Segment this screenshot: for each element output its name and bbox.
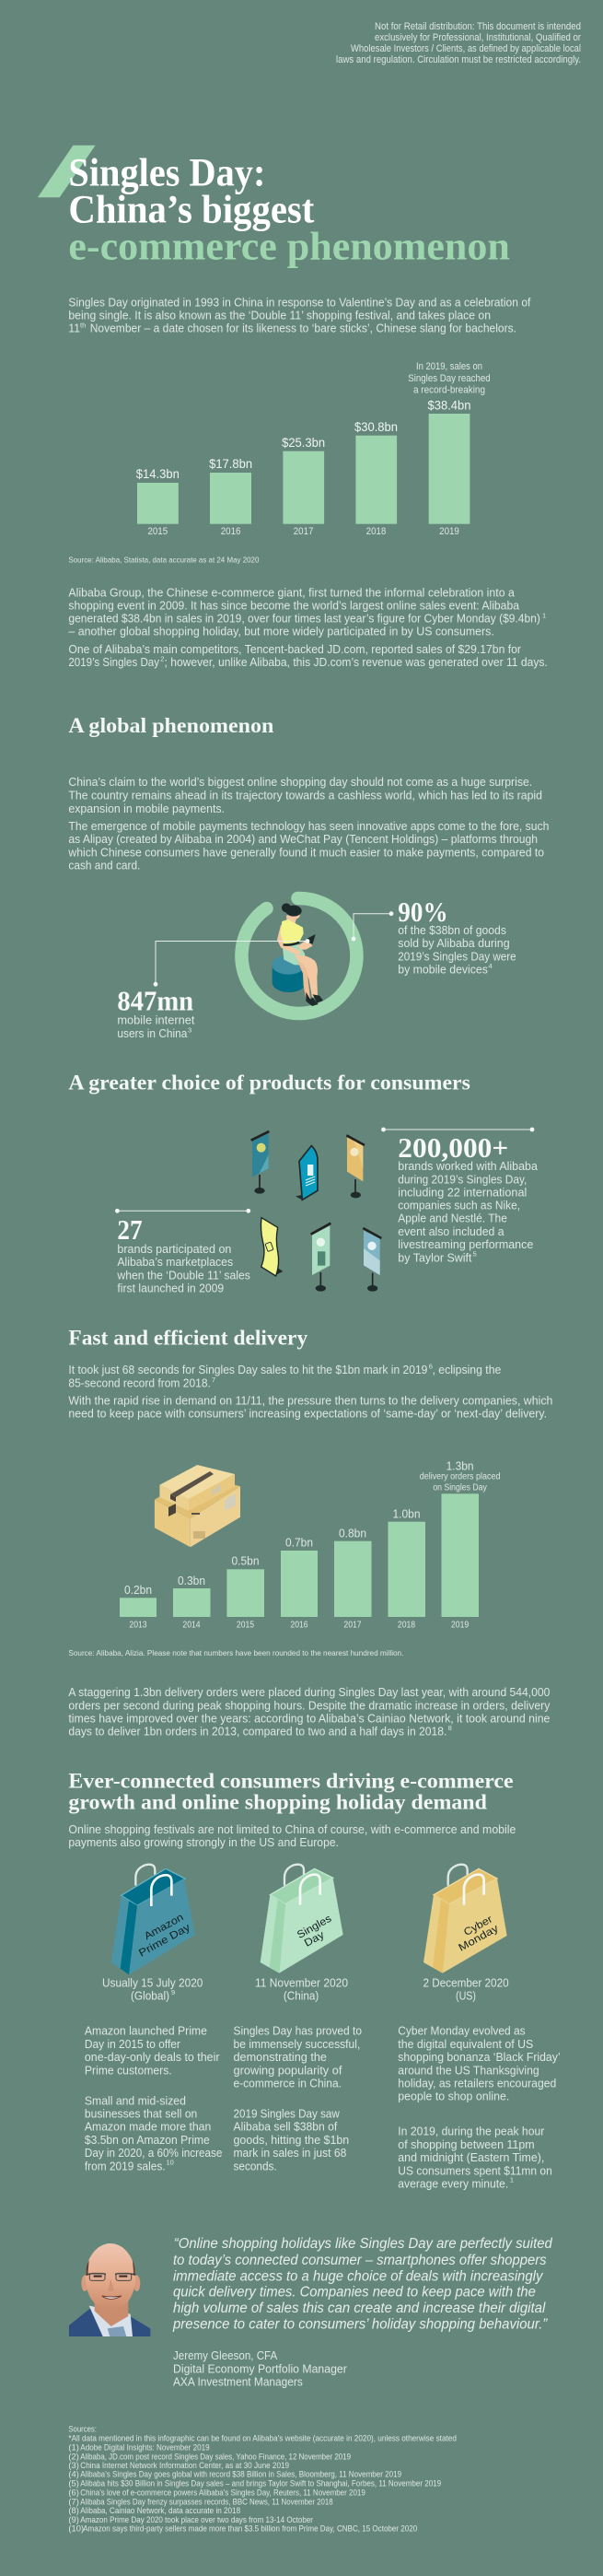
sources: Adobe Digital Insights: November 2019 — [80, 2441, 210, 2452]
chart annotation: a record-breaking — [413, 385, 485, 396]
stat: 27 brands: when the ‘Double 11’ sales — [116, 1268, 250, 1282]
bar chart: delivery orders — [120, 1458, 500, 1631]
column: Singles Day — [234, 2024, 362, 2172]
paragraph: Alibaba Group: generated $38.4bn in sales in 2019, over four times last year’s figure for Cyber Monday ($9.4bn) — [68, 612, 540, 626]
column: Singles Day: Singles Day has proved to — [234, 2024, 362, 2038]
stat: 27 brands: Alibaba’s marketplaces — [117, 1255, 233, 1269]
title: e-commerce phenomenon — [68, 226, 510, 269]
bar values: 0.8bn — [339, 1527, 366, 1540]
column: Amazon Prime Day: Day in 2015 to offer — [85, 2037, 181, 2051]
stat: 200,000+: brands worked with Alibaba — [398, 1159, 539, 1173]
paragraph: 68 seconds — [68, 1362, 501, 1389]
stat: 200,000+: 5 — [473, 1249, 477, 1259]
column: Cyber Monday: holiday, as retailers encouraged — [398, 2076, 556, 2090]
sources: Alibaba, Cainiao Network, data accurate in 2018 — [80, 2505, 240, 2515]
column: Amazon Prime Day — [85, 2024, 222, 2172]
column: Cyber Monday — [398, 2024, 561, 2190]
paragraph: mobile payments: The emergence of mobile payments technology has seen innovative apps come to the fore, such — [68, 819, 549, 833]
bag: Cyber Monday: Cyber — [462, 1914, 494, 1938]
year axis: 2016 — [221, 526, 240, 537]
bag: Singles Day — [261, 1865, 343, 1973]
sources: Sources: — [68, 2424, 97, 2434]
column: Cyber Monday: around the US Thanksgiving — [398, 2063, 539, 2077]
column: Singles Day: 2019 Singles Day saw — [234, 2107, 340, 2121]
stat: 27 brands: 27 — [117, 1213, 143, 1246]
paragraph: Alibaba Group: shopping event in 2009. It has since become the world’s largest online sales event: Alibaba — [68, 598, 520, 612]
paragraph: 68 seconds: It took just 68 seconds for Singles Day sales to hit the $1bn mark in 2019 — [68, 1363, 427, 1376]
column: Cyber Monday: 1 — [510, 2176, 514, 2184]
sources: (10) — [68, 2523, 84, 2534]
intro paragraph — [68, 295, 531, 335]
column: Singles Day: Alibaba sell $38bn of — [234, 2120, 338, 2134]
stat: 200,000+: Apple and Nestlé. The — [398, 1212, 507, 1225]
paragraph: cashless world — [68, 775, 542, 815]
intro paragraph: being single. It is also known as the ‘Double 11’ shopping festival, and takes place on — [68, 308, 491, 322]
date caption: Cyber Monday: 2 December 2020 — [423, 1976, 509, 1990]
quote: high volume of sales this can create and increase their digital — [173, 2301, 546, 2316]
disclaimer text — [336, 21, 581, 65]
chart annotation: In 2019, sales on — [416, 361, 482, 372]
paragraph: online shopping festivals: payments also growing strongly in the US and Europe. — [68, 1835, 339, 1849]
sources: (3) — [68, 2460, 79, 2470]
date caption: Singles Day: (China) — [284, 1989, 319, 2003]
column: Amazon Prime Day: Day in 2020, a 60% increase — [85, 2146, 222, 2160]
stat: 27 brands: first launched in 2009 — [117, 1282, 224, 1295]
paragraph: JD.com: 2019’s Singles Day — [68, 655, 160, 669]
stat: 200,000+ — [381, 1128, 539, 1264]
chart annotation: delivery orders placed — [420, 1472, 500, 1482]
column: Amazon Prime Day: from 2019 sales. — [85, 2159, 166, 2172]
year axis: 2015 — [147, 526, 168, 537]
column: Cyber Monday: In 2019, during the peak hour — [398, 2125, 545, 2138]
date caption: Prime Day: (Global) — [131, 1989, 169, 2003]
year axis — [147, 526, 459, 537]
sources: (7) — [68, 2496, 79, 2506]
column: Cyber Monday: Cyber Monday evolved as — [398, 2024, 526, 2038]
date caption: Cyber Monday — [423, 1976, 509, 2003]
paragraph: JD.com: ; however, unlike Alibaba, this JD.com’s revenue was generated over 11 days. — [164, 655, 548, 669]
bar values: $30.8bn — [354, 419, 398, 434]
paragraph: JD.com — [68, 642, 548, 669]
bag: Singles Day: Day — [303, 1929, 327, 1950]
sources: (5) — [68, 2478, 79, 2488]
stat: 200,000+: 200,000+ — [398, 1131, 508, 1164]
illustration: display banners — [251, 1131, 381, 1292]
year axis: 2018 — [366, 526, 386, 537]
bar values: 0.2bn — [124, 1583, 152, 1597]
bar chart: Singles Day sales — [136, 361, 491, 537]
stat: 90 percent: of the $38bn of goods — [398, 923, 506, 937]
quote: presence to cater to consumers’ holiday shopping behaviour.” — [172, 2317, 548, 2333]
quote attribution: Digital Economy Portfolio Manager — [173, 2361, 347, 2375]
portrait: Jeremy Gleeson — [69, 2243, 150, 2336]
column: Singles Day: seconds. — [234, 2159, 277, 2172]
column: Cyber Monday: people to shop online. — [398, 2089, 509, 2102]
paragraph: cashless world: The country remains ahead in its trajectory towards a cashless world, which has led to its rapid — [68, 789, 542, 802]
year axis — [129, 1621, 470, 1631]
paragraph: delivery pressure — [68, 1393, 552, 1421]
year axis: 2015 — [237, 1621, 254, 1631]
stat: 90 percent — [398, 896, 516, 977]
stat: 90 percent: by mobile devices — [398, 963, 488, 977]
quote attribution: AXA Investment Managers — [173, 2374, 303, 2388]
connector: 847mn — [154, 939, 309, 987]
paragraph: mobile payments: which Chinese consumers have generally found it much easier to make payments, compared to — [67, 845, 544, 859]
intro paragraph: November – a date chosen for its likeness to ‘bare sticks’, Chinese slang for bachelors. — [90, 321, 516, 335]
sources: Alibaba Singles Day frenzy surpasses records, BBC News, 11 November 2018 — [80, 2496, 333, 2506]
bar values: 1.3bn — [446, 1458, 474, 1472]
bag: Singles Day: Singles — [296, 1913, 334, 1941]
bag: Amazon Prime Day: Amazon — [143, 1912, 186, 1942]
paragraph: Alibaba Group: – another global shopping holiday, but more widely participated in by US consumers. — [68, 625, 494, 638]
column: Singles Day: goods, hitting the $1bn — [234, 2133, 349, 2147]
bag: Amazon Prime Day: Prime Day — [137, 1922, 192, 1960]
bar values: $25.3bn — [282, 435, 325, 450]
heading: A global phenomenon: A global phenomenon — [68, 714, 274, 737]
chart annotation — [420, 1472, 500, 1493]
bar values: $14.3bn — [136, 466, 180, 481]
sources: *All data mentioned in this infographic can be found on Alibaba’s website (accurate in 2020), unless otherwise stated — [68, 2433, 457, 2443]
stat: 200,000+: by Taylor Swift — [398, 1250, 472, 1264]
decorative title slash — [38, 146, 96, 197]
illustration: woman on stool with phone — [272, 903, 323, 1006]
column: Cyber Monday: of shopping between 11pm — [398, 2137, 535, 2151]
chart annotation: on Singles Day — [433, 1482, 487, 1493]
bag: Cyber Monday — [423, 1865, 507, 1973]
stat: 200,000+: livestreaming performance — [398, 1237, 533, 1251]
chart source: Source: Alibaba, Statista, data accurate as at 24 May 2020 — [68, 556, 260, 565]
column: Singles Day: e-commerce in China. — [234, 2076, 342, 2090]
bar values — [124, 1458, 474, 1597]
sources: Alibaba hits $30 Billion in Singles Day sales – and brings Taylor Swift to Shanghai, Forbes, 11 November 2019 — [80, 2478, 441, 2488]
paragraph: delivery pressure: With the rapid rise in demand on 11/11, the pressure then turns to the delivery companies, which — [68, 1393, 552, 1407]
stat: 90 percent: sold by Alibaba during — [398, 936, 510, 950]
paragraph: 68 seconds: 85-second record from 2018. — [68, 1376, 211, 1389]
column: Singles Day: mark in sales in just 68 — [234, 2146, 346, 2160]
column: Cyber Monday: US consumers spent $11mn on — [398, 2163, 552, 2177]
banner: teal sun — [251, 1131, 269, 1194]
sources: (4) — [68, 2469, 79, 2479]
bag: Amazon Prime Day — [111, 1865, 195, 1974]
shopping bags — [111, 1865, 507, 1974]
stat: 27 brands — [115, 1209, 250, 1295]
stat: 847mn: 3 — [188, 1026, 191, 1034]
column: Amazon Prime Day: Amazon launched Prime — [85, 2024, 207, 2038]
bar values: 0.7bn — [285, 1536, 313, 1550]
date caption: Cyber Monday: (US) — [456, 1989, 476, 2003]
quote attribution — [173, 2348, 347, 2388]
stat: 200,000+: event also included a — [398, 1224, 504, 1238]
intro paragraph: 11 — [68, 321, 80, 335]
paragraph: cashless world: expansion in mobile payments. — [68, 802, 225, 815]
column: Cyber Monday: and midnight (Eastern Time), — [398, 2150, 544, 2164]
quote: immediate access to a huge choice of deals with increasingly — [173, 2268, 544, 2284]
heading: delivery: Fast and efficient delivery — [68, 1326, 308, 1349]
stat: 200,000+: during 2019’s Singles Day, — [398, 1172, 527, 1186]
date caption: Prime Day: 9 — [171, 1988, 175, 1996]
column: Amazon Prime Day: Prime customers. — [85, 2063, 172, 2077]
stat: 90 percent: 2019’s Singles Day were — [398, 949, 516, 963]
paragraph: mobile payments — [67, 819, 549, 872]
paragraph: 1.3bn orders: A staggering 1.3bn delivery orders were placed during Singles Day last year, with around 544,000 — [68, 1685, 550, 1699]
column: Amazon Prime Day: $3.5bn on Amazon Prime — [85, 2133, 210, 2147]
sources: Amazon says third-party sellers made more than $3.5 billion from Prime Day, CNBC, 15 October 2020 — [83, 2523, 417, 2534]
bars — [137, 414, 470, 524]
quote: quick delivery times. Companies need to keep pace with the — [173, 2285, 536, 2301]
column: Cyber Monday: the digital equivalent of US — [398, 2037, 533, 2051]
heading: ever-connected consumers: growth and online shopping holiday demand — [68, 1790, 487, 1813]
stat: 200,000+: including 22 international — [398, 1185, 527, 1199]
year axis: 2013 — [129, 1621, 147, 1631]
sources: Alibaba’s Singles Day goes global with record $38 Billion in Sales, Bloomberg, 11 November 2019 — [80, 2469, 401, 2479]
sources: (6) — [68, 2488, 79, 2498]
quote: “Online shopping holidays like Singles Day are perfectly suited — [174, 2236, 553, 2252]
sources: China Internet Network Information Center, as at 30 June 2019 — [80, 2460, 289, 2470]
quote attribution: Jeremy Gleeson, CFA — [173, 2348, 278, 2362]
column: Singles Day: demonstrating the — [234, 2050, 327, 2064]
banner: blue kiosk — [296, 1146, 318, 1200]
year axis: 2017 — [294, 526, 313, 537]
date caption: Singles Day: 11 November 2020 — [255, 1976, 348, 1990]
column: Singles Day: be immensely successful, — [234, 2037, 360, 2051]
column: Cyber Monday: average every minute. — [398, 2176, 508, 2190]
column: Amazon Prime Day: Small and mid-sized — [85, 2093, 186, 2107]
paragraph: online shopping festivals: Online shopping festivals are not limited to China of course, with e-commerce and mobile — [68, 1822, 516, 1836]
paragraph: 68 seconds: , eclipsing the — [433, 1363, 501, 1376]
bag: Cyber Monday: Monday — [457, 1923, 501, 1954]
heading: ever-connected consumers: Ever-connected consumers driving e-commerce — [68, 1770, 514, 1793]
title: China’s biggest — [68, 189, 315, 232]
disclaimer text: Not for Retail distribution: This document is intended — [375, 21, 581, 32]
stat: 27 brands: brands participated on — [117, 1242, 231, 1256]
year axis: 2016 — [290, 1621, 308, 1631]
stat: 200,000+: companies such as Nike, — [398, 1199, 520, 1212]
banner: amber — [346, 1135, 365, 1198]
chart annotation: Singles Day reached — [408, 373, 491, 384]
paragraph: JD.com: One of Alibaba’s main competitors, Tencent-backed JD.com, reported sales of $29.17bn for — [68, 642, 522, 656]
paragraph: online shopping festivals — [68, 1822, 516, 1849]
heading: greater choice: A greater choice of products for consumers — [68, 1071, 470, 1095]
stat: 847mn: mobile internet — [117, 1013, 195, 1027]
column: Amazon Prime Day: one-day-only deals to their — [85, 2050, 220, 2064]
year axis: 2019 — [439, 526, 459, 537]
bar values: 0.5bn — [232, 1553, 260, 1567]
paragraph: Alibaba Group: 1 — [542, 612, 546, 619]
date caption: Prime Day: Usually 15 July 2020 — [102, 1976, 203, 1990]
year axis: 2018 — [398, 1621, 415, 1631]
title: Singles Day: — [68, 152, 265, 195]
stat: 90 percent: 4 — [488, 962, 493, 970]
bar values: 1.0bn — [392, 1507, 420, 1521]
stat: 847mn: users in China — [117, 1026, 188, 1040]
paragraph: mobile payments: cash and card. — [68, 859, 140, 872]
title — [68, 152, 510, 269]
paragraph: 68 seconds: 6 — [429, 1362, 433, 1371]
bar values: $17.8bn — [209, 456, 252, 471]
year axis: 2019 — [451, 1621, 470, 1631]
paragraph: 1.3bn orders: times have improved over the years: according to Alibaba’s Cainiao Network, it took around nine — [68, 1711, 550, 1725]
column: Amazon Prime Day: Amazon made more than — [85, 2120, 211, 2134]
chart annotation — [408, 361, 491, 396]
chart source: Source: Alibaba, Alizia. Please note that numbers have been rounded to the nearest hundred million. — [68, 1648, 403, 1657]
quote: to today’s connected consumer – smartphones offer shoppers — [173, 2253, 547, 2268]
sources: (8) — [68, 2505, 79, 2515]
intro paragraph: Singles Day originated in 1993 in China in response to Valentine’s Day and as a celebration of — [68, 295, 531, 309]
ring 90 percent — [241, 898, 356, 1013]
sources: Amazon Prime Day 2020 took place over two days from 13-14 October — [80, 2514, 313, 2524]
bar values: $38.4bn — [427, 397, 471, 412]
bars — [120, 1493, 479, 1617]
sources: (2) — [68, 2451, 79, 2461]
paragraph: 68 seconds: 7 — [212, 1376, 215, 1384]
paragraph: delivery pressure: need to keep pace with consumers’ increasing expectations of ‘same-day’ or ‘next-day’ delivery. — [68, 1407, 547, 1421]
connector: 90 percent — [352, 911, 393, 941]
sources: (1) — [68, 2441, 79, 2452]
paragraph: 1.3bn orders — [68, 1685, 551, 1739]
paragraph: Alibaba Group: Alibaba Group, the Chinese e-commerce giant, first turned the informal celebration into a — [68, 585, 516, 599]
column: Amazon Prime Day: 10 — [166, 2158, 174, 2167]
paragraph: cashless world: China’s claim to the world’s biggest online shopping day should not come as a huge surprise. — [68, 775, 532, 789]
stat: 847mn: 847mn — [117, 985, 193, 1017]
year axis: 2017 — [343, 1621, 362, 1631]
column: Amazon Prime Day: businesses that sell on — [85, 2107, 197, 2121]
bar values: 0.3bn — [178, 1574, 205, 1587]
paragraph: mobile payments: as Alipay (created by Alibaba in 2004) and WeChat Pay (Tencent Holdings) – platforms through — [68, 832, 538, 846]
paragraph: 1.3bn orders: orders per second during peak shopping hours. Despite the dramatic increase in orders, delivery — [68, 1698, 551, 1712]
year axis: 2014 — [182, 1621, 201, 1631]
sources: Alibaba, JD.com post record Singles Day sales, Yahoo Finance, 12 November 2019 — [80, 2451, 351, 2461]
date caption: Prime Day — [102, 1976, 203, 2003]
heading: ever-connected consumers — [68, 1770, 514, 1813]
paragraph: Alibaba Group — [68, 585, 546, 638]
sources: China’s love of e-commerce powers Alibaba’s Singles Day, Reuters, 11 November 2019 — [80, 2488, 365, 2498]
sources: (9) — [68, 2514, 79, 2524]
illustration: cardboard boxes — [155, 1465, 240, 1547]
intro paragraph: th — [80, 321, 86, 330]
paragraph: 1.3bn orders: 8 — [448, 1724, 452, 1732]
quote — [172, 2236, 553, 2333]
bar values — [136, 397, 471, 481]
banner: yellow wave — [261, 1218, 283, 1276]
column: Cyber Monday: shopping bonanza ‘Black Friday’ — [398, 2050, 561, 2064]
paragraph: JD.com: 2 — [160, 654, 164, 663]
stat: 90 percent: 90% — [398, 896, 448, 928]
paragraph: 1.3bn orders: days to deliver 1bn orders in 2013, compared to two and a half days in 2018. — [68, 1725, 446, 1739]
stat: 847mn — [117, 985, 195, 1040]
banner: pale blue — [363, 1228, 381, 1292]
column: Singles Day: growing popularity of — [234, 2063, 342, 2077]
sources — [68, 2424, 457, 2534]
date caption: Singles Day — [255, 1976, 348, 2003]
banner: green — [311, 1224, 330, 1292]
